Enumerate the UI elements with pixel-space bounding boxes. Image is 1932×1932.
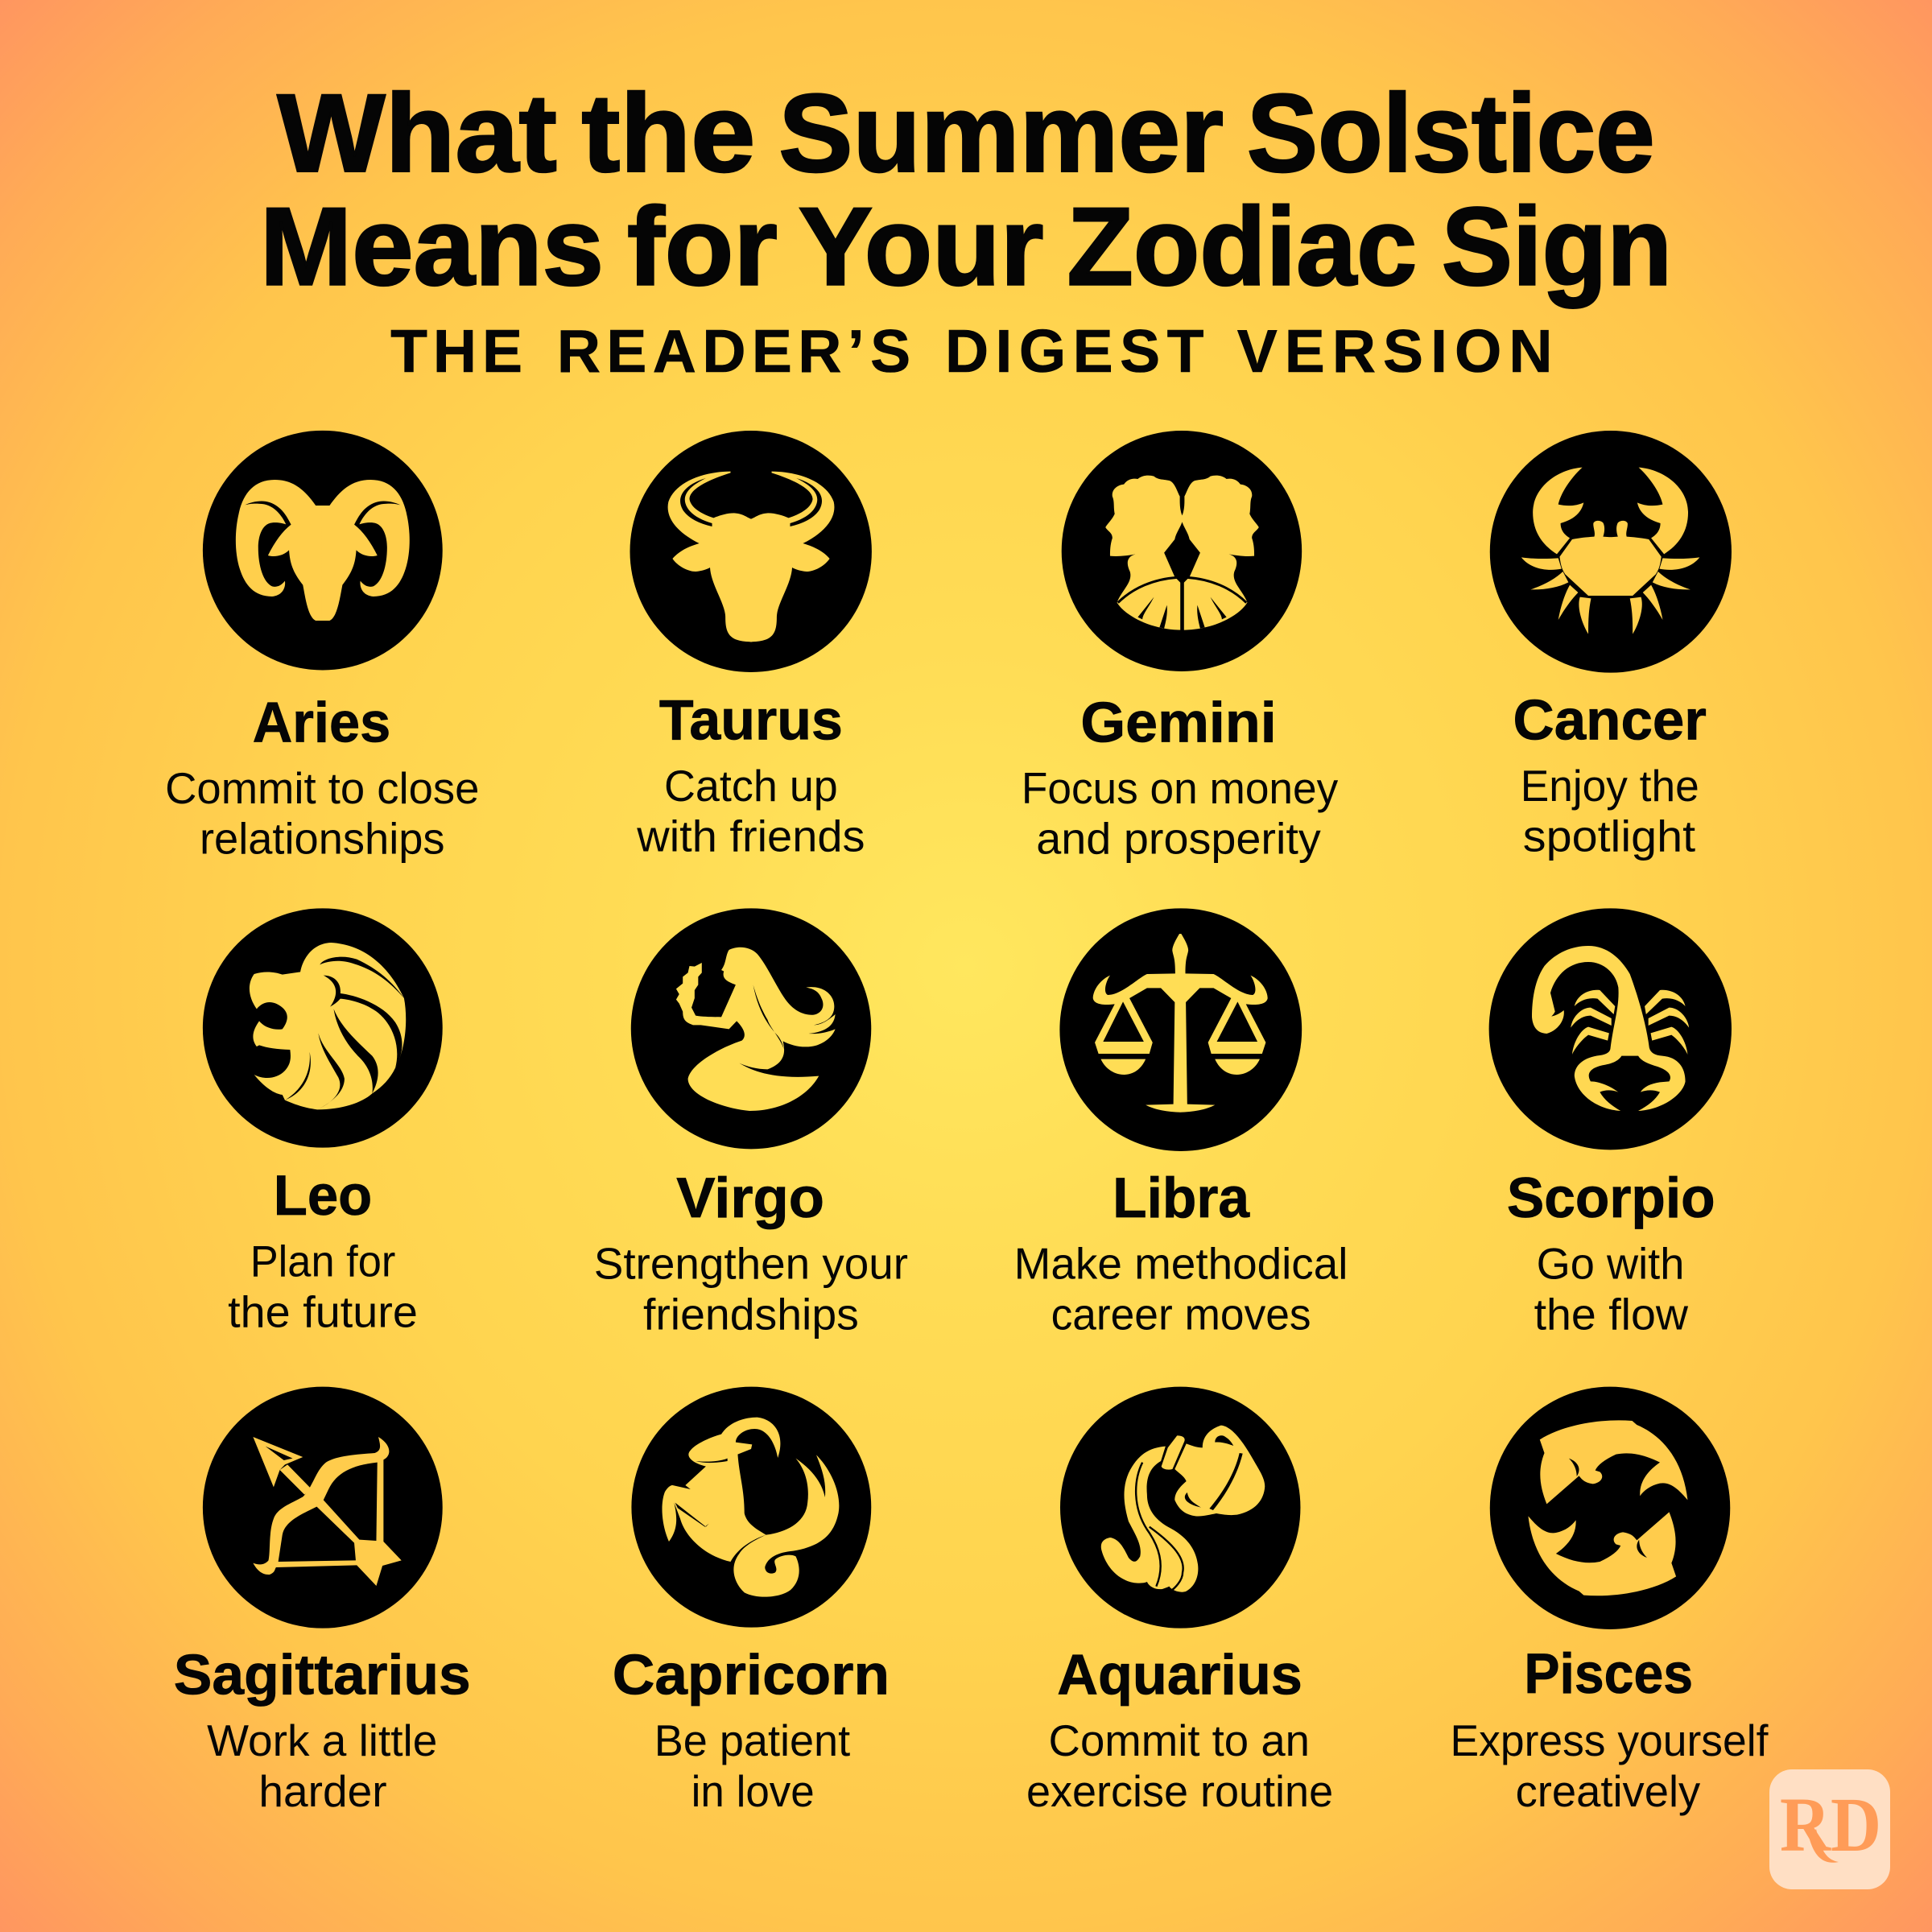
sign name: Gemini bbox=[1080, 690, 1277, 753]
description: spotlight bbox=[1523, 811, 1695, 861]
title: Your bbox=[799, 185, 1043, 309]
icon: twin profiles bbox=[1062, 431, 1302, 671]
sign name: Libra bbox=[1113, 1166, 1250, 1229]
title: for bbox=[627, 185, 778, 309]
title: Means bbox=[260, 185, 604, 309]
panel: Pisces bbox=[1451, 1387, 1769, 1816]
icon: sea goat bbox=[631, 1387, 871, 1628]
description bbox=[594, 1239, 908, 1340]
description: the future bbox=[228, 1286, 418, 1336]
description: Express yourself bbox=[1451, 1715, 1769, 1765]
subtitle: THE bbox=[390, 317, 522, 385]
title: Solstice bbox=[1247, 72, 1655, 196]
description: Strengthen your bbox=[594, 1239, 908, 1289]
description: with friends bbox=[636, 811, 865, 861]
icon: scales bbox=[1059, 908, 1302, 1151]
sign name: Pisces bbox=[1524, 1641, 1693, 1705]
panel: Leo bbox=[203, 908, 443, 1336]
description bbox=[1534, 1239, 1688, 1340]
panel: Aquarius bbox=[1026, 1387, 1333, 1816]
description: Focus on money bbox=[1022, 763, 1339, 813]
panel: Taurus bbox=[630, 431, 872, 861]
description: Go with bbox=[1537, 1239, 1684, 1289]
description bbox=[1022, 763, 1339, 864]
sign name: Virgo bbox=[676, 1166, 824, 1229]
description bbox=[207, 1715, 437, 1816]
description: and prosperity bbox=[1036, 814, 1321, 864]
icon: ram head bbox=[203, 431, 443, 670]
icon: lion head bbox=[203, 908, 443, 1148]
icon: scorpion bbox=[1489, 908, 1732, 1150]
description: creatively bbox=[1516, 1766, 1701, 1816]
sign name: Aries bbox=[253, 690, 390, 753]
panel: Virgo bbox=[594, 908, 908, 1340]
title: What bbox=[277, 72, 557, 196]
panel: Gemini bbox=[1022, 431, 1339, 864]
panel: Sagittarius bbox=[174, 1387, 471, 1816]
subtitle: READER’S bbox=[557, 317, 910, 385]
sign name: Cancer bbox=[1513, 687, 1707, 751]
description bbox=[1451, 1715, 1769, 1816]
sign name: Scorpio bbox=[1507, 1166, 1715, 1229]
subtitle: VERSION bbox=[1237, 317, 1553, 385]
panel: Aries bbox=[165, 431, 479, 864]
icon: bow and arrow bbox=[203, 1387, 443, 1629]
title: the bbox=[581, 72, 755, 196]
subtitle: DIGEST bbox=[945, 317, 1203, 385]
description: relationships bbox=[200, 814, 445, 864]
description bbox=[654, 1715, 850, 1816]
description: exercise routine bbox=[1026, 1766, 1333, 1816]
panel: Capricorn bbox=[613, 1387, 890, 1816]
description: friendships bbox=[643, 1290, 859, 1340]
title: Sign bbox=[1442, 185, 1672, 309]
logo: RD badge bbox=[1769, 1769, 1890, 1889]
description bbox=[228, 1236, 418, 1336]
sign name: Taurus bbox=[659, 687, 843, 751]
title bbox=[260, 72, 1672, 309]
description bbox=[636, 761, 865, 861]
description: Commit to an bbox=[1049, 1715, 1310, 1765]
panel: Cancer bbox=[1490, 431, 1732, 861]
sign name: Aquarius bbox=[1057, 1643, 1302, 1707]
description: Make methodical bbox=[1014, 1239, 1348, 1289]
sign name: Leo bbox=[274, 1163, 372, 1227]
description bbox=[1014, 1239, 1348, 1340]
description: the flow bbox=[1534, 1290, 1688, 1340]
sign name: Sagittarius bbox=[174, 1643, 471, 1707]
icon: maiden with wheat bbox=[631, 908, 871, 1149]
description: career moves bbox=[1051, 1290, 1311, 1340]
description: harder bbox=[258, 1766, 387, 1816]
description: Catch up bbox=[664, 761, 838, 811]
icon: crab bbox=[1490, 431, 1732, 673]
subtitle bbox=[390, 317, 1553, 385]
description: in love bbox=[691, 1766, 815, 1816]
title: Zodiac bbox=[1067, 185, 1417, 309]
icon: bull head bbox=[630, 431, 872, 672]
logo: RD badge: RD bbox=[1780, 1781, 1881, 1868]
description: Work a little bbox=[207, 1715, 437, 1765]
description: Be patient bbox=[654, 1715, 850, 1765]
description: Plan for bbox=[250, 1236, 395, 1286]
title: Summer bbox=[778, 72, 1224, 196]
icon: water jug bbox=[1060, 1387, 1300, 1629]
description: Commit to close bbox=[165, 763, 479, 813]
description: Enjoy the bbox=[1521, 761, 1699, 811]
description bbox=[165, 763, 479, 864]
panel: Scorpio bbox=[1489, 908, 1732, 1340]
icon: two fish bbox=[1490, 1387, 1730, 1629]
sign name: Capricorn bbox=[613, 1643, 890, 1707]
description bbox=[1026, 1715, 1333, 1816]
panel: Libra bbox=[1014, 908, 1348, 1340]
description bbox=[1521, 761, 1699, 861]
